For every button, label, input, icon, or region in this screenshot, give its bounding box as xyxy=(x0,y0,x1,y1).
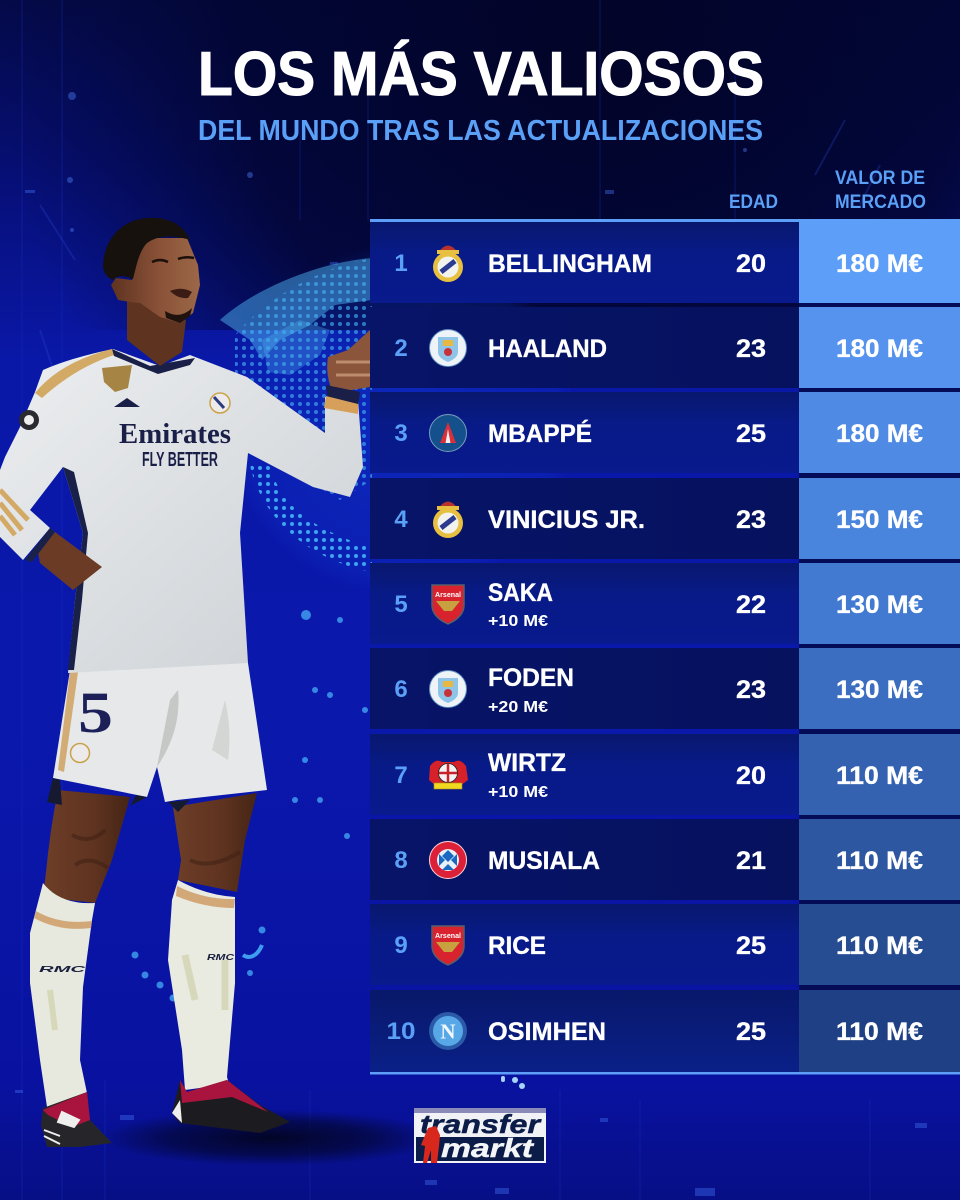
row 4: VINICIUS JR. xyxy=(488,506,645,534)
row 7: 7 xyxy=(394,762,408,789)
left hand xyxy=(37,532,102,590)
logo: transfermarkt: markt xyxy=(441,1133,535,1163)
right sock xyxy=(168,880,235,1090)
row 5: 22 xyxy=(736,591,766,619)
neck and head xyxy=(127,298,186,366)
title: LOS MÁS VALIOSOS xyxy=(198,40,764,109)
row 1: 20 xyxy=(736,250,766,278)
row 10: OSIMHEN xyxy=(488,1018,606,1046)
crest: Real Madrid xyxy=(433,502,463,538)
row 4: 150 M€ xyxy=(836,506,923,534)
left leg xyxy=(43,790,130,903)
icon: footballer xyxy=(421,1126,440,1163)
table column headers: VALOR DE xyxy=(835,168,925,189)
player figure: 5 xyxy=(78,680,113,745)
row 10: 110 M€ xyxy=(836,1018,923,1046)
row 7: 20 xyxy=(736,762,766,790)
table column headers: MERCADO xyxy=(835,192,926,213)
row 10: 25 xyxy=(736,1018,766,1046)
row 9: RICE xyxy=(488,932,546,960)
row 6: 130 M€ xyxy=(836,676,923,704)
crest: Leverkusen xyxy=(429,761,468,789)
crest: Manchester City xyxy=(430,670,466,708)
row 5: 5 xyxy=(394,591,408,618)
row 6 xyxy=(370,648,960,729)
player figure xyxy=(0,218,440,1166)
row 5 xyxy=(370,563,960,644)
row 6: FODEN xyxy=(488,664,574,692)
row 5: SAKA xyxy=(488,579,553,607)
row 3: 3 xyxy=(394,420,408,447)
crest: Arsenal: Arsenal xyxy=(435,931,461,940)
row 7 xyxy=(370,734,960,815)
ground shadow xyxy=(100,1110,440,1166)
row 4 xyxy=(370,478,960,559)
row 2: 23 xyxy=(736,335,766,363)
player figure: FLY BETTER xyxy=(142,449,218,471)
jersey crests and sponsor xyxy=(102,365,132,392)
row 1 xyxy=(370,222,960,303)
right leg xyxy=(173,793,257,892)
row 7: 110 M€ xyxy=(836,762,923,790)
left sock xyxy=(30,883,95,1107)
row 6: 6 xyxy=(394,676,408,703)
title xyxy=(198,40,764,147)
row 1: 1 xyxy=(394,250,408,277)
row 8 xyxy=(370,819,960,900)
row 10 xyxy=(370,990,960,1072)
row 9: 110 M€ xyxy=(836,932,923,960)
row 3: 25 xyxy=(736,420,766,448)
logo: transfermarkt: transfer xyxy=(420,1109,542,1139)
left boot xyxy=(41,1092,112,1147)
row 8: 8 xyxy=(394,847,408,874)
row 8: 110 M€ xyxy=(836,847,923,875)
row 5: 130 M€ xyxy=(836,591,923,619)
right boot xyxy=(172,1080,290,1133)
right hand xyxy=(327,330,370,393)
row 9: 9 xyxy=(394,932,408,959)
row 2 xyxy=(370,307,960,388)
row 8: 21 xyxy=(736,847,766,875)
torso and arms xyxy=(0,349,363,673)
row 7: WIRTZ xyxy=(488,749,566,777)
shorts xyxy=(53,660,267,802)
player figure: RMC xyxy=(207,953,234,962)
row 1: BELLINGHAM xyxy=(488,250,652,278)
player figure: RMC xyxy=(39,965,86,974)
ranking table xyxy=(370,219,960,1074)
row 9 xyxy=(370,904,960,985)
crest: Arsenal xyxy=(432,926,464,965)
crest: Manchester City xyxy=(430,330,466,366)
row 1: 180 M€ xyxy=(836,250,923,278)
row 4: 23 xyxy=(736,506,766,534)
crest: Bayern xyxy=(429,841,467,879)
crest: Real Madrid xyxy=(433,246,463,282)
row 2: 180 M€ xyxy=(836,335,923,363)
player figure: Emirates xyxy=(119,419,231,450)
row 6: 23 xyxy=(736,676,766,704)
row 2: HAALAND xyxy=(488,335,607,363)
crest: Napoli: N xyxy=(440,1020,456,1044)
row 3: 180 M€ xyxy=(836,420,923,448)
row 8: MUSIALA xyxy=(488,847,600,875)
row 3 xyxy=(370,392,960,473)
row 4: 4 xyxy=(394,506,408,533)
row 9: 25 xyxy=(736,932,766,960)
crest: Arsenal: Arsenal xyxy=(435,590,461,599)
table column headers xyxy=(729,168,926,213)
row 6: +20 M€ xyxy=(488,699,548,716)
crest: PSG xyxy=(430,414,466,452)
table column headers: EDAD xyxy=(729,192,778,213)
row 3: MBAPPÉ xyxy=(488,419,592,448)
row 7: +10 M€ xyxy=(488,784,548,801)
crest: Napoli xyxy=(429,1012,467,1050)
row 2: 2 xyxy=(394,335,408,362)
logo: transfermarkt xyxy=(414,1108,546,1163)
subtitle: DEL MUNDO TRAS LAS ACTUALIZACIONES xyxy=(198,115,763,147)
globe graphic xyxy=(132,245,575,1089)
row 10: 10 xyxy=(386,1018,416,1045)
crest: Arsenal xyxy=(432,585,464,624)
row 5: +10 M€ xyxy=(488,613,548,630)
